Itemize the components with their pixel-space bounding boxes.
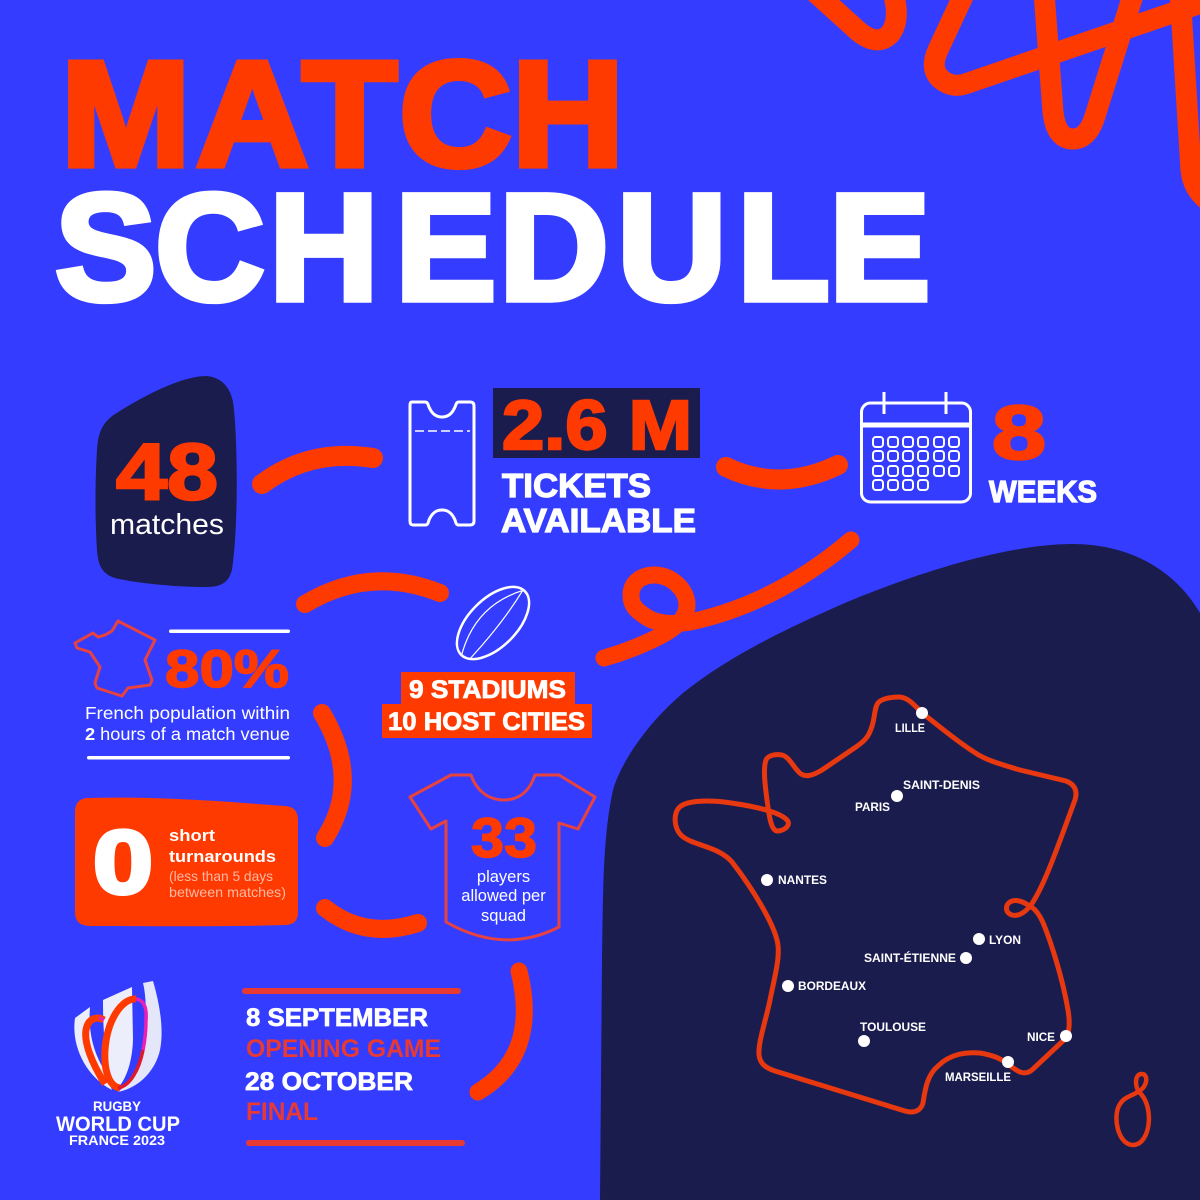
panel: key dates [242,988,465,1146]
arrow connector: looped squiggle [604,540,851,658]
panel: stadiums and host cities: 10 HOST CITIES [388,708,585,736]
opening game label: OPENING GAME [246,1035,441,1063]
panel: 48 matches [96,376,237,587]
matches label: matches [110,509,224,541]
city labels: SAINT-ÉTIENNE [864,950,956,965]
panel: short turnarounds: between matches) [169,884,286,900]
arrow connector: matches to tickets [262,456,373,484]
2.6 M figure: 2.6 M [502,386,692,464]
squad text: players [477,868,530,886]
city labels [778,721,1055,1084]
icon: France outline [75,621,155,696]
icon: ticket [410,402,474,525]
weeks label: WEEKS [989,474,1097,509]
panel: short turnarounds: turnarounds [169,848,276,866]
title line: MATCH: MATCH [61,30,624,198]
city labels: LILLE [895,721,925,735]
bottom rule [87,756,290,760]
top rule [242,988,461,994]
final label: FINAL [246,1098,318,1126]
arrow connector: tickets to weeks [726,465,838,480]
stadiums label text: 9 STADIUMS [409,676,566,704]
arrow connector: right arc [322,713,343,838]
city labels: PARIS [855,800,890,814]
bottom rule [246,1140,465,1146]
city labels: LYON [989,933,1021,947]
city dots [761,707,1072,1068]
tickets available text: TICKETS [502,467,651,504]
icon: rugby ball [444,574,542,672]
panel: squad size: allowed per [461,887,546,905]
title [55,30,930,333]
decorative top-right squiggle [815,0,1200,202]
panel: short turnarounds [75,798,298,926]
population text: French population within [85,703,290,723]
top rule [169,630,290,633]
panel: stadiums and host cities [382,574,592,738]
city labels: BORDEAUX [798,979,866,993]
panel: 80 percent [75,621,290,760]
logo emblem [74,981,162,1092]
arrow connector: ball to stadiums arc [305,581,440,604]
red box [75,798,298,926]
48 figure: 48 [116,427,218,516]
8 September date: 8 SEPTEMBER [246,1004,428,1032]
arrow connector: lower arc [325,908,418,929]
map of France with host cities [675,697,1076,1112]
33 figure: 33 [471,806,537,869]
city labels: TOULOUSE [860,1020,926,1034]
logo: Rugby World Cup France 2023: WORLD CUP [56,1113,180,1136]
0 figure: 0 [93,813,153,913]
8 figure: 8 [992,391,1046,476]
stadiums label boxes [401,672,575,705]
arrow connector: dates arc [478,971,524,1092]
panel: 80 percent: 2 hours of a match venue [85,724,290,744]
turnaround text: short [169,827,216,845]
80% figure: 80% [165,640,289,699]
panel: short turnarounds: (less than 5 days [169,868,273,884]
city labels: SAINT-DENIS [903,778,980,792]
city labels: NICE [1027,1030,1055,1044]
title line: SCHEDULE: SCHEDULE [55,163,930,333]
city labels: NANTES [778,873,827,887]
badge shape [96,376,237,587]
icon: calendar [861,392,971,502]
city labels: MARSEILLE [945,1070,1011,1084]
panel: squad size: squad [481,907,526,925]
logo wordmark: RUGBY [93,1098,142,1114]
panel: tickets [410,386,700,539]
icon: shirt [410,775,595,940]
navy map background shape [600,544,1200,1200]
panel: squad size [410,775,595,940]
28 October date: 28 OCTOBER [245,1068,413,1096]
decorative small squiggle (Corsica) [1116,1074,1149,1145]
panel: tickets: AVAILABLE [501,502,696,539]
logo: Rugby World Cup France 2023: FRANCE 2023 [69,1132,165,1148]
2.6 M box [493,388,700,458]
logo: Rugby World Cup France 2023 [56,981,180,1148]
panel: 8 weeks [861,391,1097,509]
France outline route [675,697,1076,1112]
